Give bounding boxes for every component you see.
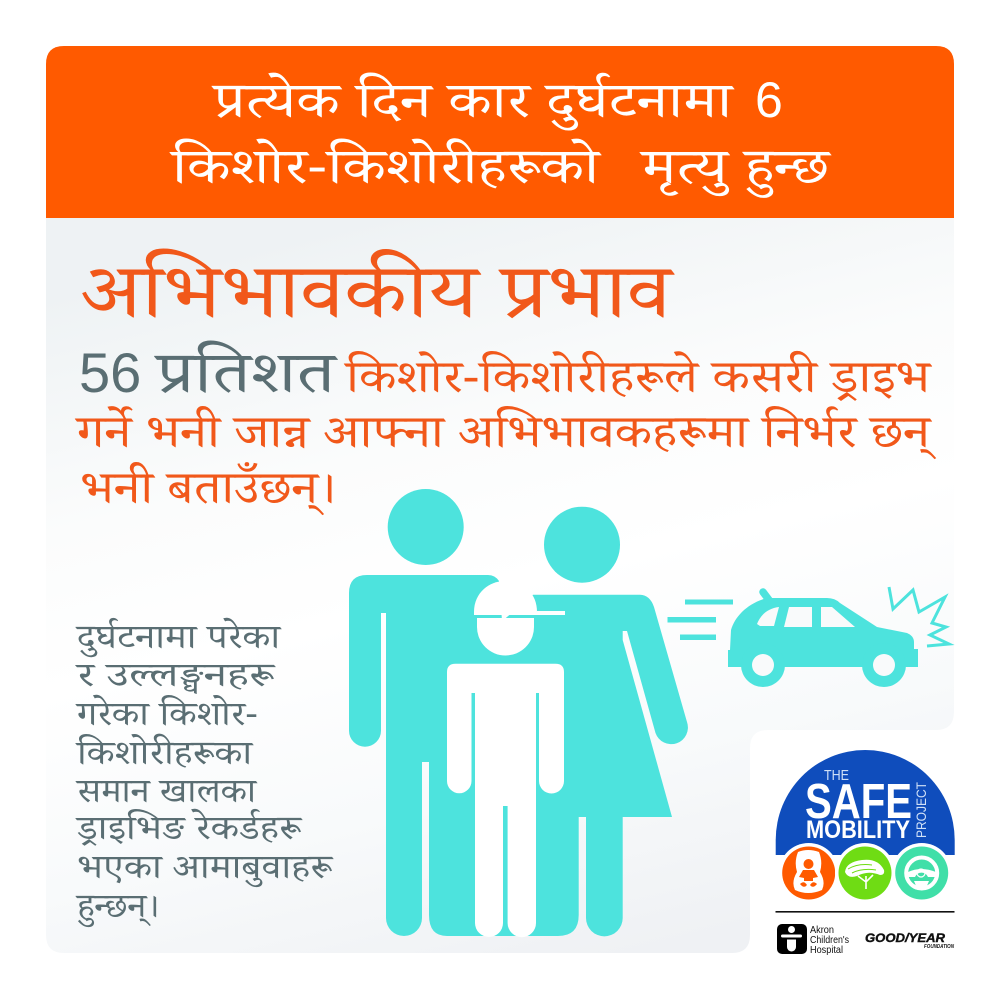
icon: child seat xyxy=(779,843,839,903)
side text block: गरेका किशोर- xyxy=(75,695,258,733)
statistic 56 percent xyxy=(79,340,338,405)
side text block: ड्राइभिङ रेकर्डहरू xyxy=(75,808,303,847)
logo: Akron Children's Hospital: Hospital xyxy=(810,944,843,956)
statistic 56 percent: 56 xyxy=(79,341,141,404)
logo blue dome xyxy=(776,750,955,855)
logo divider xyxy=(776,911,954,913)
header title: 6 xyxy=(755,72,783,128)
logo: Akron Children's Hospital xyxy=(777,924,849,956)
car body xyxy=(728,592,918,687)
side text block: समान खालका xyxy=(75,772,258,810)
impact burst xyxy=(889,587,949,646)
statistic description: गर्ने भनी जान्न आफ्ना अभिभावकहरूमा निर्भर छन् xyxy=(75,405,937,460)
logo: Akron Children's Hospital: Akron xyxy=(810,924,834,936)
car windows and wheel hubs xyxy=(752,607,895,676)
header title: किशोर-किशोरीहरूको xyxy=(170,138,602,194)
logo: Goodyear Foundation: FOUNDATION xyxy=(924,944,954,950)
header banner xyxy=(46,46,954,218)
header title: मृत्यु हुन्छ xyxy=(640,138,833,198)
statistic description xyxy=(75,350,937,516)
speed lines xyxy=(668,600,733,640)
icon: mother xyxy=(480,507,688,936)
logo wordmark: SAFE xyxy=(805,775,912,829)
side text block: भएका आमाबुवाहरू xyxy=(77,848,334,887)
icon: crashing car xyxy=(668,587,949,687)
logo: Goodyear Foundation: GOOD/YEAR xyxy=(865,931,945,945)
statistic paragraph xyxy=(75,340,937,516)
family figures xyxy=(349,489,688,937)
header background xyxy=(46,46,954,218)
logo wordmark: PROJECT xyxy=(913,782,929,838)
side text block xyxy=(74,617,334,928)
side text block: हुन्छन्। xyxy=(75,887,160,928)
icon: father xyxy=(349,489,505,936)
side text block: दुर्घटनामा परेका xyxy=(75,617,282,658)
logo wordmark: THE xyxy=(824,767,849,784)
panel: main background xyxy=(46,218,954,953)
logo: The Safe Mobility Project xyxy=(776,750,955,956)
icon: steering wheel xyxy=(892,843,952,903)
heading: अभिभावकीय प्रभाव xyxy=(81,248,675,334)
logo wordmark: MOBILITY xyxy=(806,816,910,844)
header title xyxy=(170,72,833,198)
statistic description: भनी बताउँछन्। xyxy=(80,461,337,516)
side text block: किशोरीहरूका xyxy=(75,733,254,772)
logo wordmark xyxy=(805,767,929,844)
icon: teen child xyxy=(447,581,565,937)
icon: bike helmet xyxy=(835,843,895,903)
side text block: र उल्लङ्घनहरू xyxy=(74,656,276,694)
statistic 56 percent: प्रतिशत xyxy=(153,340,338,405)
header title: प्रत्येक दिन कार दुर्घटनामा xyxy=(212,72,735,131)
statistic description: किशोर-किशोरीहरूले कसरी ड्राइभ xyxy=(344,350,932,402)
logo: Akron Children's Hospital: Children's xyxy=(810,934,849,946)
logo: Goodyear Foundation xyxy=(865,931,954,950)
